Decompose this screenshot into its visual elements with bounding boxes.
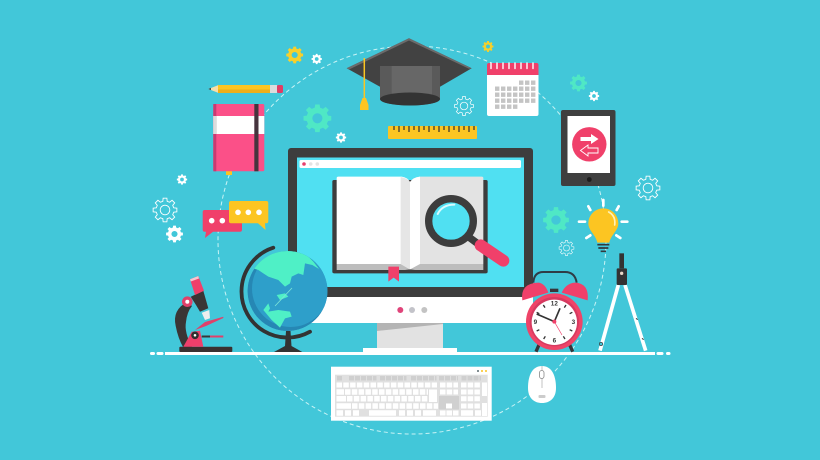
gear: white far left [177,174,187,185]
gear: teal upper right [570,75,587,91]
continents [253,250,319,328]
clock numerals: 12 [551,300,558,307]
monitor [288,148,533,352]
gears [153,41,660,255]
clock numerals [534,300,576,344]
globe sphere [248,250,329,331]
graduation cap [347,38,472,110]
gear: teal left [304,104,331,132]
clock feet [536,344,573,352]
drawing compass [599,253,646,351]
gear: outline left [153,198,177,222]
monitor chin [288,297,533,323]
illustration: online education desk scene [150,38,670,434]
magnifying glass [429,199,503,261]
yellow bubble [229,201,268,230]
keyboard keys [336,382,484,416]
alarm clock [522,272,588,352]
clock bells [522,283,548,300]
gear: white near cap [312,54,322,64]
monitor screen [297,158,524,287]
microscope [175,276,232,352]
tablet [561,110,616,186]
gear: teal right [543,207,569,233]
gear: white upper right [589,91,599,101]
monitor bezel [288,148,533,297]
calendar [487,63,538,116]
cap base [380,66,440,106]
shelf line [150,352,670,355]
notebook [213,104,264,175]
clock numerals: 9 [534,319,538,326]
dashed orbit circle [218,46,606,434]
clock numerals: 3 [572,319,576,326]
monitor stand [363,322,457,352]
clock hands [537,308,562,335]
calendar date cells [495,83,536,107]
gear: small outline right [559,241,574,255]
chin dots [397,307,427,313]
clock body [526,293,583,350]
tablet swap icon [572,127,606,162]
gear: yellow small top [483,41,493,52]
speech bubbles [203,201,268,238]
keyboard [331,367,492,421]
tassel [360,58,368,110]
light bulb [579,200,627,251]
gear: outline under cap [455,97,473,115]
clock numerals: 6 [553,337,557,344]
ruler [388,126,477,139]
browser bar [300,160,521,168]
gear: white under teal [336,132,346,143]
mouse [528,366,556,403]
keyboard navigation gap [439,396,459,410]
globe stand [241,248,310,352]
keyboard function row [337,376,481,381]
clock handle [533,272,577,283]
pencil [208,85,283,93]
gear: white solid left [166,226,183,242]
keyboard nav keys [440,404,458,416]
globe [241,248,329,352]
keyboard status lights [477,370,487,372]
cap board [347,38,472,87]
gear: outline right [636,176,660,200]
open book [332,177,488,282]
bulb rays [579,200,627,238]
gear: yellow large [286,47,303,63]
red bubble [203,210,242,238]
